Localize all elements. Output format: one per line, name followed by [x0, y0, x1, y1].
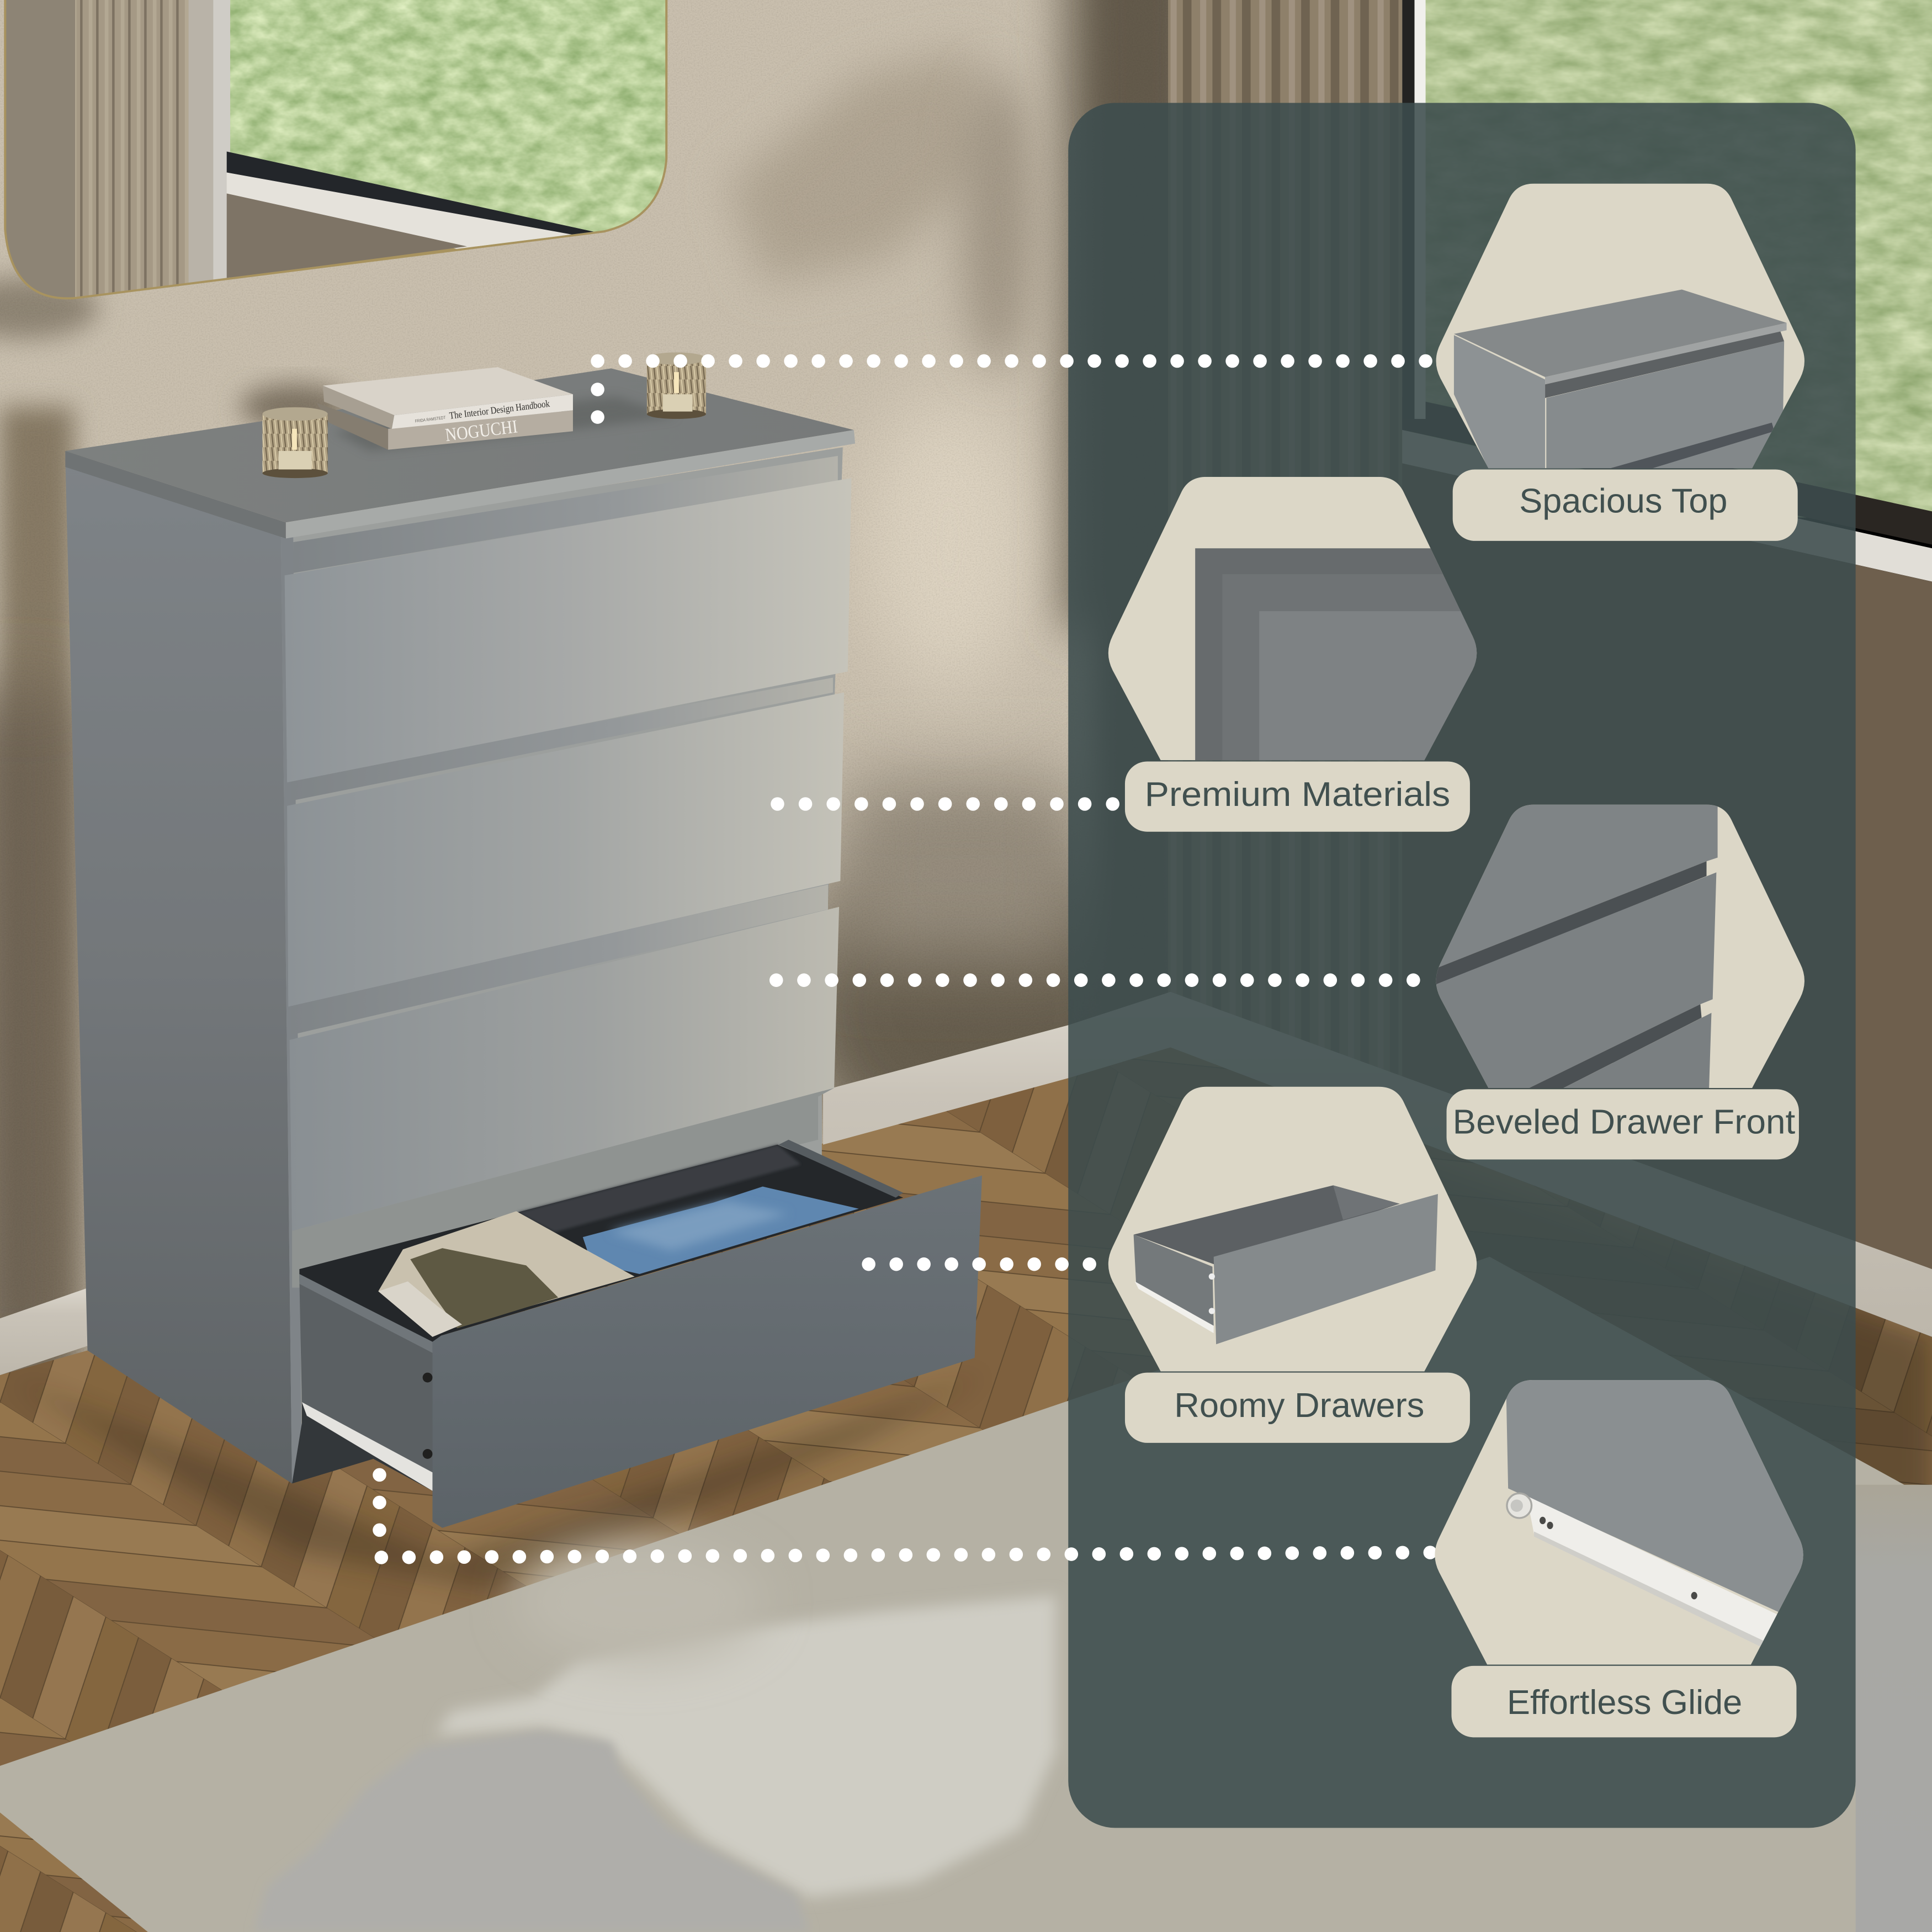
dresser side panel — [65, 458, 292, 1483]
candle left — [262, 407, 328, 478]
gap band 1 — [291, 678, 833, 801]
pale clothes — [378, 1211, 635, 1337]
drawer side — [299, 1281, 432, 1485]
roller — [1507, 1493, 1532, 1518]
dotted leader: spacious top — [598, 361, 1427, 417]
dotted leader: roomy drawers — [869, 1261, 1090, 1267]
label: roomy drawers — [1125, 1373, 1470, 1443]
label: roomy drawers: Roomy Drawers — [1174, 1386, 1424, 1425]
floor shadows — [12, 1140, 1932, 1589]
olive sweater — [410, 1248, 558, 1328]
feature: roomy drawers — [1108, 1087, 1477, 1443]
back layer — [1195, 548, 1491, 770]
middle drawer — [1417, 872, 1716, 1090]
jeans — [583, 1187, 859, 1274]
curtain — [1168, 0, 1402, 1084]
upper book: FRIDA RAMSTEDT — [415, 415, 446, 424]
front layer — [1259, 611, 1493, 771]
lower book: NOGUCHI — [444, 416, 519, 445]
floor — [0, 1047, 1932, 1932]
upper drawer — [1417, 795, 1718, 976]
middle layer — [1222, 574, 1493, 771]
lower groove — [1524, 1004, 1702, 1090]
rug — [0, 1257, 1932, 1932]
gray drawer side — [1506, 1368, 1824, 1633]
dotted leader: premium materials — [777, 801, 1114, 807]
drawer front — [1546, 341, 1784, 493]
wall — [0, 0, 1429, 1392]
dotted leader: beveled drawer front — [776, 977, 1414, 983]
right drawer rim — [779, 1140, 903, 1198]
outdoor foliage window — [1171, 0, 1932, 1281]
groove — [1417, 861, 1707, 993]
label: spacious top — [1453, 469, 1798, 541]
hexagon: beveled drawer front — [1417, 795, 1824, 1097]
feature: effortless glide — [1417, 1368, 1824, 1737]
books — [317, 367, 573, 450]
open drawer — [292, 1088, 982, 1528]
label: effortless glide: Effortless Glide — [1507, 1683, 1742, 1722]
chest top — [1454, 290, 1787, 377]
lower band above opening — [292, 1088, 834, 1288]
white fold — [378, 1281, 462, 1337]
drawer front panel — [432, 1175, 982, 1528]
drawer interior — [299, 1145, 903, 1350]
hexagon: premium materials — [1097, 468, 1493, 771]
upper book — [323, 367, 573, 429]
panel: features — [1068, 103, 1856, 1828]
front frame edge — [281, 537, 302, 1483]
back wall of drawer — [518, 1145, 801, 1232]
hexagon: effortless glide — [1417, 1368, 1824, 1676]
drawer 3 — [290, 907, 839, 1231]
hexagon: spacious top — [1417, 172, 1824, 493]
dotted leader: effortless glide — [380, 1475, 1431, 1557]
skirting boards — [0, 992, 1932, 1375]
feature: spacious top — [1417, 172, 1824, 541]
under drawer recess — [292, 1355, 444, 1491]
screws — [423, 1373, 432, 1459]
hexagon: roomy drawers — [1108, 1087, 1477, 1371]
top recess band — [293, 456, 838, 573]
rug right strip — [1856, 1485, 1932, 1932]
lower book — [317, 403, 573, 450]
side of chest — [1454, 335, 1545, 474]
label: beveled drawer front — [1447, 1089, 1799, 1159]
label: effortless glide — [1451, 1666, 1796, 1737]
feature: beveled drawer front — [1417, 795, 1824, 1159]
mirror — [0, 0, 674, 308]
dresser — [65, 368, 982, 1528]
slide rail — [302, 1402, 432, 1491]
drawer 1 — [285, 478, 851, 782]
lower drawer — [1559, 1013, 1711, 1090]
rug grey patch — [254, 1731, 810, 1932]
rail — [1527, 1496, 1779, 1646]
label: premium materials — [1125, 761, 1470, 832]
gap band 2 — [291, 885, 828, 1035]
upper book: The Interior Design Handbook — [449, 398, 550, 421]
groove — [1545, 331, 1784, 398]
dresser front carcass — [281, 447, 843, 1484]
feature: premium materials — [1097, 468, 1493, 832]
rug pale patch — [436, 1596, 1056, 1898]
label: premium materials: Premium Materials — [1145, 775, 1450, 814]
rail holes — [1540, 1517, 1697, 1599]
drawer image — [1134, 1185, 1438, 1344]
candle right — [647, 352, 706, 419]
drawer 2 — [287, 692, 844, 1007]
label: spacious top: Spacious Top — [1519, 482, 1727, 521]
shadows on top — [333, 397, 678, 451]
label: beveled drawer front: Beveled Drawer Front — [1453, 1103, 1795, 1142]
dresser top — [65, 368, 855, 538]
